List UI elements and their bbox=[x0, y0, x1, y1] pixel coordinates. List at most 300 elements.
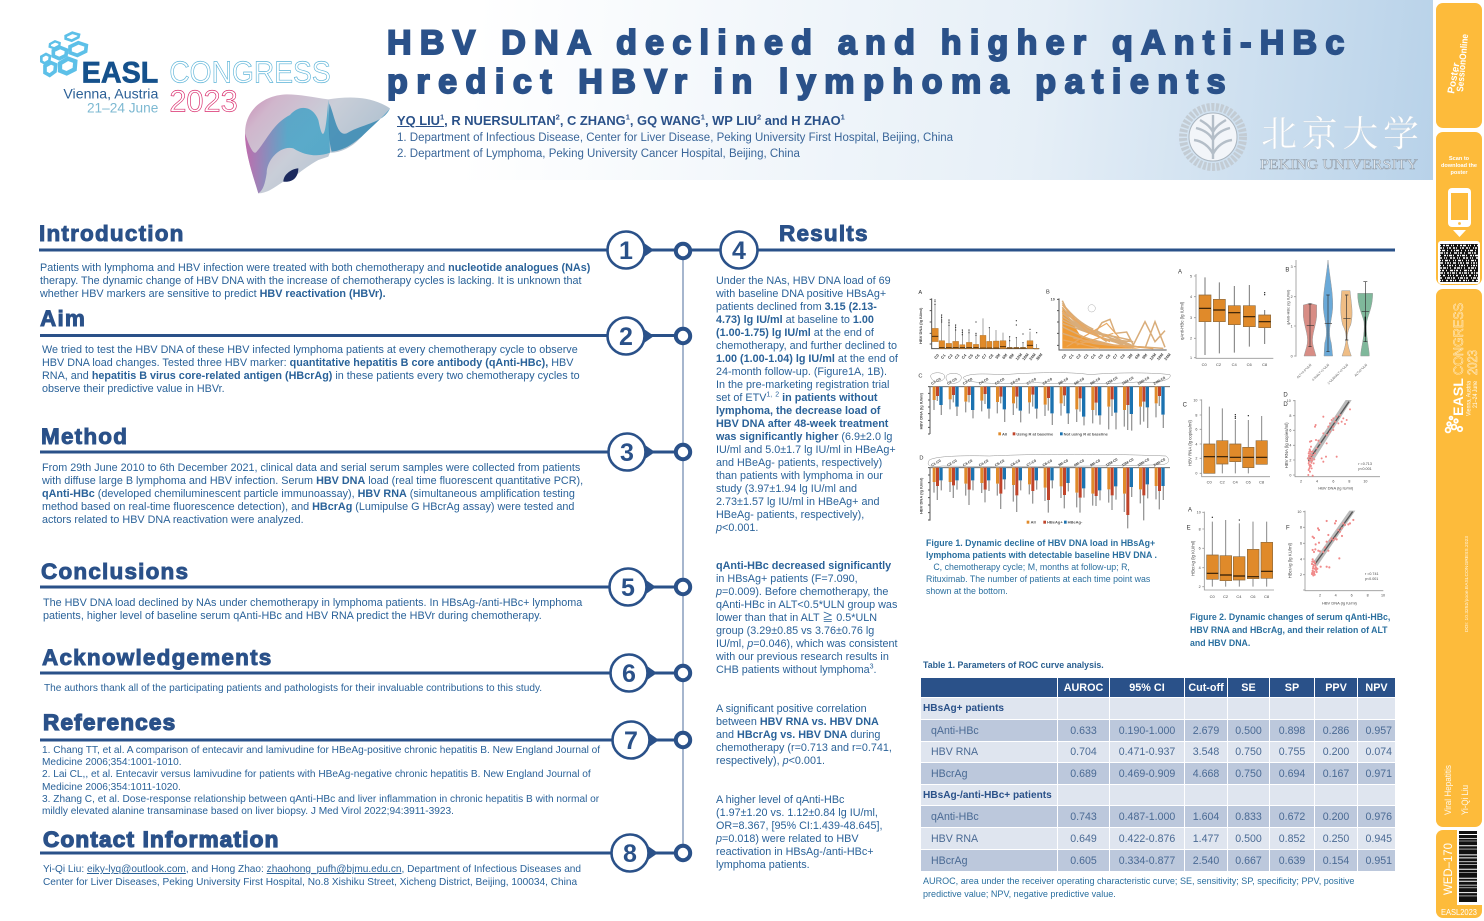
chart 2E: HBcrAg box plot bbox=[1187, 507, 1274, 599]
text: results paragraph 2: IU/ml, p=0.046), which was consistent bbox=[716, 638, 898, 650]
chart 2D: HBV RNA scatter: 8 bbox=[1289, 414, 1291, 418]
text: conclusions bbox=[43, 597, 582, 622]
table: ROC parameters: 0.469-0.909 bbox=[1119, 768, 1175, 780]
table: ROC parameters: NPV bbox=[1365, 682, 1388, 694]
chart 1C: grouped bars: Using R at baseline bbox=[1016, 431, 1054, 436]
chart 1D: grouped bars: C3-C0 bbox=[962, 459, 973, 468]
chart 1B: spaghetti plot: C4 bbox=[1090, 352, 1097, 360]
chart 1A: box plot: 36M bbox=[1035, 352, 1044, 361]
chart 1B: spaghetti plot: C5 bbox=[1097, 352, 1105, 360]
table: ROC parameters bbox=[921, 678, 1395, 871]
text: results paragraph 2: in HBsAg+ patients (F=7.090, bbox=[716, 572, 858, 584]
text: aim bbox=[42, 344, 580, 394]
affiliations bbox=[397, 132, 953, 160]
text: results paragraph 1: Under the NAs, HBV DNA load of 69 bbox=[716, 274, 891, 286]
text: method: qAnti-HBc (developed chemiluminescent particle immunoassay), HBV RNA (simultaneous amplification testing bbox=[42, 488, 575, 500]
title bbox=[387, 24, 1352, 101]
marker 6 bbox=[610, 654, 657, 692]
text: results paragraph 2: with our previous research results in bbox=[716, 650, 889, 662]
heading: Acknowledgements: Acknowledgements bbox=[42, 645, 272, 670]
table: ROC parameters: 0.167 bbox=[1323, 768, 1349, 780]
university name in Chinese: 北京大学 bbox=[1261, 106, 1419, 157]
chart 2A: qAnti-HBc box plot: C8 bbox=[1262, 362, 1268, 367]
chart 2C: HBV RNA box plot: 10 bbox=[1193, 398, 1197, 402]
chart 2A: qAnti-HBc box plot bbox=[1178, 269, 1273, 367]
chart 1D: grouped bars: HBeAg- bbox=[1068, 520, 1083, 525]
text: aim: observe their predictive value in HBVr. bbox=[42, 382, 225, 394]
table: ROC parameters: 0.074 bbox=[1365, 746, 1392, 758]
university name in English: PEKING UNIVERSITY bbox=[1260, 157, 1418, 173]
chart 1A: box plot: C4 bbox=[960, 352, 968, 360]
heading: Method: Method bbox=[41, 424, 128, 449]
text: results paragraph 3: chemotherapy (r=0.713 and r=0.741, bbox=[716, 742, 892, 754]
chart 1C: grouped bars: 15M-C0 bbox=[1121, 376, 1134, 386]
text: results paragraph 1: 4.73) lg IU/ml at baseline to 1.00 bbox=[716, 314, 874, 326]
table: ROC parameters: 0.667 bbox=[1235, 854, 1262, 866]
table: ROC parameters: HBcrAg bbox=[931, 854, 968, 866]
text: results paragraph 2: qAnti-HBc in ALT<0.5*ULN group was bbox=[716, 598, 897, 610]
figure 1 caption: Rituximab. The number of patients at each time point was bbox=[926, 574, 1150, 584]
chart 1B: spaghetti plot: 12M bbox=[1148, 352, 1158, 361]
chart 1A: box plot: C8 bbox=[987, 352, 995, 360]
chart 2B: violin plot: 2 bbox=[1291, 295, 1293, 299]
chart 1C: grouped bars: C8-C0 bbox=[1042, 377, 1053, 386]
chart 2F: HBcrAg scatter: HBcrAg (lg KU/ml) bbox=[1287, 542, 1292, 578]
affiliations: 1. Department of Infectious Disease, Center for Liver Disease, Peking University First Hospital, Beijing, China bbox=[397, 132, 953, 144]
table: ROC parameters: HBsAg+ patients bbox=[923, 703, 1004, 714]
text: results paragraph 1: 24-month follow-up. (Figure1A, 1B). bbox=[716, 366, 887, 378]
chart 2B: violin plot: 1 bbox=[1291, 324, 1293, 328]
table: ROC parameters: 0.286 bbox=[1323, 724, 1349, 736]
chart 2B: violin plot: ALT≥2*ULN bbox=[1353, 362, 1369, 377]
chart 1C: grouped bars: 18M-C0 bbox=[1137, 376, 1150, 386]
chart 2D: HBV RNA scatter: 6 bbox=[1289, 429, 1291, 433]
chart 1A: box plot: C0 bbox=[933, 352, 941, 360]
marker 4: 4 bbox=[732, 237, 746, 265]
table: ROC parameters: HBsAg-/anti-HBc+ patients bbox=[923, 790, 1052, 800]
text: contact: Center for Liver Diseases, Peking University First Hospital, No.8 Xishiku Street, Xicheng District, Beijing, 100034, China bbox=[43, 877, 577, 888]
chart 2C: HBV RNA box plot: C4 bbox=[1233, 479, 1239, 484]
text: introduction bbox=[40, 262, 590, 300]
chart 2A: qAnti-HBc box plot: A bbox=[1178, 269, 1182, 275]
text: aim: We tried to test the HBV DNA of these HBV infected lymphoma patients at every chemotherapy cycle to observe bbox=[42, 344, 578, 356]
heading: Conclusions: Conclusions bbox=[41, 559, 189, 584]
table: ROC parameters: 1.604 bbox=[1193, 810, 1219, 822]
chart 2D: HBV RNA scatter: 4 bbox=[1289, 444, 1291, 448]
year: 2023 bbox=[1465, 350, 1480, 375]
text: references: 1. Chang TT, et al. A comparison of entecavir and lamivudine for HBeAg-positive chronic hepatitis B. New England Journal of bbox=[42, 745, 600, 756]
table: ROC parameters: PPV bbox=[1325, 682, 1347, 694]
chart 1B: spaghetti plot: 18M bbox=[1156, 352, 1165, 361]
table: ROC parameters: 3.548 bbox=[1193, 746, 1219, 758]
marker 5 bbox=[610, 568, 656, 606]
text: references: Medicine 2006;354:1001-1010. bbox=[42, 757, 182, 768]
chart 1A: box plot: C3 bbox=[953, 352, 961, 360]
text: results paragraph 1: set of ETV1, 2 in patients without bbox=[716, 391, 878, 404]
chart 2E: HBcrAg box plot: C8 bbox=[1264, 594, 1270, 599]
chart 2F: HBcrAg scatter: 6 bbox=[1351, 594, 1353, 598]
table: ROC parameters: 0.200 bbox=[1323, 810, 1349, 822]
panel: scan to download: poster bbox=[1450, 170, 1468, 176]
poster id: WED–170 bbox=[1441, 843, 1455, 895]
figure 2 charts top bbox=[1178, 260, 1380, 491]
affiliations: 2. Department of Lymphoma, Peking University Cancer Hospital, Beijing, China bbox=[397, 148, 800, 160]
table: ROC parameters: 0.500 bbox=[1235, 832, 1262, 844]
chart 2D: HBV RNA scatter: r =0.713 bbox=[1358, 462, 1372, 466]
table: ROC parameters: 0.689 bbox=[1070, 768, 1097, 780]
text: results paragraph 3: A significant positive correlation bbox=[716, 702, 867, 714]
chart 2D: HBV RNA scatter: 8 bbox=[1348, 480, 1350, 484]
year 2023: 2023 bbox=[169, 85, 238, 119]
marker 2: 2 bbox=[619, 323, 633, 351]
text: results paragraph 2 bbox=[716, 560, 898, 676]
chart 2C: HBV RNA box plot: 2 bbox=[1195, 457, 1197, 461]
text: references: mildly elevated alanine transaminase based on liver biopsy. J Med Virol 2022;94:3911-3923. bbox=[42, 806, 454, 817]
text: results paragraph 4: A higher level of qAnti-HBc bbox=[716, 794, 844, 806]
table: ROC parameters: 0.951 bbox=[1365, 854, 1392, 866]
chart 2E: HBcrAg box plot: C6 bbox=[1250, 594, 1256, 599]
QR code bbox=[1438, 241, 1480, 284]
table: ROC parameters: 4.668 bbox=[1193, 768, 1219, 780]
chart 1D: grouped bars: 9M-C0 bbox=[1090, 459, 1101, 468]
text: results paragraph 1 bbox=[716, 274, 898, 534]
chart 2A: qAnti-HBc box plot: C6 bbox=[1247, 362, 1253, 367]
table: ROC parameters: HBV RNA bbox=[931, 746, 978, 758]
text: contact: Yi-Qi Liu: eiky-lyq@outlook.com, and Hong Zhao: zhaohong_pufh@bjmu.edu.cn, Department of Infectious Diseases and bbox=[43, 864, 581, 875]
chart 2E: HBcrAg box plot: 4 bbox=[1199, 566, 1201, 570]
marker 1 bbox=[608, 232, 729, 268]
chart 1C: grouped bars: 12M-C0 bbox=[1105, 376, 1118, 386]
chart 2F: HBcrAg scatter: r =0.741 bbox=[1365, 572, 1379, 576]
chart 1D: grouped bars: C2-C0 bbox=[946, 459, 958, 468]
barcode bbox=[1459, 831, 1477, 902]
text: references: 2. Lai CL,, et al. Entecavir versus lamivudine for patients with HBeAg-negative chronic hepatitis B. New England Journal of bbox=[42, 769, 591, 780]
chart 1B: spaghetti plot: 24M bbox=[1163, 352, 1172, 361]
text: conclusions: The HBV DNA load declined by NAs under chemotherapy in lymphoma patients. In HBsAg-/anti-HBc+ lymphoma bbox=[43, 597, 582, 609]
table: ROC parameters: SE bbox=[1241, 682, 1256, 694]
chart 2D: HBV RNA scatter: D bbox=[1283, 402, 1288, 408]
chart 2B: violin plot: 0 bbox=[1291, 354, 1293, 358]
figure 2 caption bbox=[1190, 612, 1390, 648]
chart 2C: HBV RNA box plot: 8 bbox=[1195, 413, 1197, 417]
author: Yi-Qi Liu bbox=[1460, 785, 1471, 815]
chart 1A: box plot: 18M bbox=[1021, 352, 1030, 361]
icon: arrow down bbox=[1453, 230, 1466, 237]
chart 1B: spaghetti plot: 10 bbox=[1051, 298, 1055, 302]
chart 1C: grouped bars: C3-C0 bbox=[962, 377, 973, 386]
chart 1B: spaghetti plot: C1 bbox=[1068, 352, 1075, 360]
icon: hexagons bbox=[1446, 417, 1462, 432]
text: results paragraph 1: HBeAg- patients, respectively), bbox=[716, 508, 864, 520]
figure 2 caption: Figure 2. Dynamic changes of serum qAnti-HBc, bbox=[1190, 612, 1390, 622]
text: method bbox=[42, 462, 583, 526]
chart 2F: HBcrAg scatter: 2 bbox=[1319, 594, 1321, 598]
table: ROC parameters: 0.487-1.000 bbox=[1119, 810, 1175, 822]
chart 1A: box plot: 6M bbox=[1001, 352, 1009, 360]
marker 4 bbox=[720, 232, 758, 268]
figure 2 caption: and HBV DNA. bbox=[1190, 638, 1250, 648]
chart 1C: grouped bars: C2-C0 bbox=[946, 377, 958, 386]
dates: 21–24 June bbox=[1473, 380, 1479, 408]
table: ROC parameters: 2.540 bbox=[1193, 854, 1219, 866]
text: results paragraph 3: respectively), p<0.001. bbox=[716, 754, 825, 766]
text: results paragraph 4 bbox=[716, 794, 883, 870]
table: ROC parameters: 0.755 bbox=[1279, 746, 1305, 758]
chart 2B: violin plot: ALT<0.5*ULN bbox=[1296, 362, 1313, 379]
chart 1B: spaghetti plot: C6 bbox=[1104, 352, 1112, 360]
chart 1D: grouped bars: C4-C0 bbox=[978, 459, 989, 468]
marker 7: 7 bbox=[624, 727, 638, 755]
table: ROC parameters: 2.679 bbox=[1193, 724, 1219, 736]
table: ROC parameters: 0.971 bbox=[1365, 768, 1392, 780]
figure 1 caption: lymphoma patients with detectable baseline HBV DNA . bbox=[926, 550, 1157, 560]
conference tag: EASL2023 bbox=[1441, 908, 1477, 917]
chart 2F: HBcrAg scatter: 8 bbox=[1300, 526, 1302, 530]
text: results paragraph 1: than patients with lymphoma in our bbox=[716, 470, 883, 482]
chart 1A: box plot bbox=[918, 290, 1044, 361]
chart 2C: HBV RNA box plot: C0 bbox=[1207, 479, 1213, 484]
chart 2A: qAnti-HBc box plot: 2 bbox=[1190, 337, 1192, 341]
table: ROC parameters: 0.898 bbox=[1279, 724, 1305, 736]
chart 1C: grouped bars: All bbox=[1002, 431, 1007, 436]
table: ROC parameters: 0.500 bbox=[1235, 724, 1262, 736]
chart 1C: grouped bars: C5-C0 bbox=[994, 377, 1005, 386]
chart 1C: grouped bars: 3M-C0 bbox=[1058, 377, 1069, 386]
table: ROC parameters: 0.200 bbox=[1323, 746, 1349, 758]
chart 1A: box plot: 3M bbox=[994, 352, 1002, 360]
chart 2F: HBcrAg scatter: 4 bbox=[1300, 557, 1302, 561]
chart 2D: HBV RNA scatter: 4 bbox=[1316, 480, 1318, 484]
marker 6: 6 bbox=[622, 660, 636, 688]
header gradient band bbox=[0, 0, 1433, 180]
marker 8 bbox=[612, 834, 658, 872]
chart 2B: violin plot: 0.5≤ALT<1*ULN bbox=[1311, 362, 1331, 382]
text: introduction: whether HBV markers are sensitive to predict HBV reactivation (HBVr). bbox=[40, 288, 386, 300]
marker 2 bbox=[608, 318, 654, 354]
text: contact bbox=[43, 864, 581, 888]
text: references: 3. Zhang C, et al. Dose-response relationship between qAnti-HBc and liver inflammation in chronic hepatitis B with normal or bbox=[42, 794, 599, 805]
chart 1A: box plot: A bbox=[918, 290, 922, 296]
heading: Contact Information: Contact Information bbox=[43, 827, 280, 852]
text: introduction: Patients with lymphoma and HBV infection were treated with both chemotherapy and nucleotide analogues (NAs) bbox=[40, 262, 590, 274]
icon: liver bbox=[245, 94, 390, 193]
table: ROC parameters: 0.639 bbox=[1279, 854, 1305, 866]
text: results paragraph 4: OR=8.367, [95% CI:1.439-48.645], bbox=[716, 820, 883, 832]
chart 1C: grouped bars: C1-C0 bbox=[930, 377, 942, 386]
chart 1A: box plot: C6 bbox=[974, 352, 981, 360]
table: ROC parameters: 0.605 bbox=[1070, 854, 1097, 866]
text: results paragraph 1: p<0.001. bbox=[716, 522, 758, 534]
text: method: From 29th June 2010 to 6th December 2021, clinical data and serial serum samples were collected from patients bbox=[42, 462, 580, 474]
chart 1D: grouped bars: 15M-C0 bbox=[1121, 458, 1134, 468]
title: predict HBVr in lymphoma patients bbox=[387, 63, 1234, 101]
chart 2C: HBV RNA box plot bbox=[1183, 398, 1270, 484]
chart 1D: grouped bars: 3M-C0 bbox=[1058, 459, 1069, 468]
location: Vienna, Austria bbox=[63, 87, 158, 103]
chart 2F: HBcrAg scatter: 8 bbox=[1367, 594, 1369, 598]
text: results paragraph 1: with baseline DNA positive HBsAg+ bbox=[716, 288, 886, 300]
text: results paragraph 1: lymphoma, the decrease load of bbox=[716, 404, 880, 416]
chart 2F: HBcrAg scatter: 6 bbox=[1300, 542, 1302, 546]
chart 1D: grouped bars: C6-C0 bbox=[1010, 459, 1021, 468]
marker 3 bbox=[608, 434, 655, 470]
table: ROC parameters: 0.945 bbox=[1365, 832, 1392, 844]
chart 2C: HBV RNA box plot: 4 bbox=[1195, 442, 1197, 446]
chart 1C: grouped bars: 24M-C0 bbox=[1153, 376, 1166, 386]
figure 1 caption: C, chemotherapy cycle; M, months at follow-up; R, bbox=[933, 562, 1130, 572]
chart 1C: grouped bars: C4-C0 bbox=[978, 377, 989, 386]
text: results paragraph 4: lymphoma patients. bbox=[716, 858, 810, 870]
chart 1D: grouped bars: C5-C0 bbox=[994, 459, 1005, 468]
chart 1C: grouped bars: C bbox=[918, 374, 922, 380]
text: results paragraph 1: In the pre-marketing registration trial bbox=[716, 378, 889, 390]
chart 1B: spaghetti plot: 9M bbox=[1141, 352, 1149, 360]
chart 2D: HBV RNA scatter: 0 bbox=[1289, 473, 1291, 477]
figure 1 charts bbox=[918, 289, 1172, 528]
table: ROC parameters: 0.743 bbox=[1070, 810, 1097, 822]
chart 2F: HBcrAg scatter: F bbox=[1286, 525, 1290, 531]
chart 1C: grouped bars bbox=[918, 373, 1170, 436]
DOI: DOI: 10.3252/pooe.EASLCONGRESS.2023 bbox=[1464, 536, 1470, 632]
figure 1 caption: Figure 1. Dynamic decline of HBV DNA load in HBsAg+ bbox=[926, 538, 1155, 548]
chart 2A: qAnti-HBc box plot: C2 bbox=[1216, 362, 1222, 367]
chart 1D: grouped bars: C1-C0 bbox=[930, 459, 942, 468]
timeline nodes bbox=[676, 244, 690, 860]
chart 1B: spaghetti plot: C8 bbox=[1119, 352, 1127, 360]
chart 1D: grouped bars: 12M-C0 bbox=[1105, 458, 1118, 468]
table: ROC parameters: 0.957 bbox=[1365, 724, 1392, 736]
chart 1B: spaghetti plot: 6M bbox=[1134, 352, 1141, 360]
chart 2B: violin plot: 1*ULN≤ALT<2*ULN bbox=[1327, 362, 1350, 385]
chart 1D: grouped bars: 6M-C0 bbox=[1074, 459, 1085, 468]
chart 2C: HBV RNA box plot: 6 bbox=[1195, 428, 1197, 432]
chart 1B: spaghetti plot: C0 bbox=[1060, 352, 1068, 360]
text: references: Medicine 2006;354:1011-1020. bbox=[42, 782, 181, 793]
chart 1C: grouped bars: C7-C0 bbox=[1026, 377, 1037, 386]
text: results paragraph 1: study (3.97±1.94 lg IU/ml and bbox=[716, 482, 857, 494]
chart 2B: violin plot: B bbox=[1285, 268, 1289, 274]
chart 2A: qAnti-HBc box plot: C0 bbox=[1202, 362, 1208, 367]
chart 2B: violin plot: 3 bbox=[1291, 265, 1293, 269]
text: results paragraph 4: reactivation in HBsAg-/anti-HBc+ bbox=[716, 846, 874, 858]
CONGRESS wordmark: CONGRESS bbox=[169, 56, 331, 90]
table: ROC parameters: 0.471-0.937 bbox=[1119, 746, 1175, 758]
text: method: method based on real-time fluorescence detection), and HBcrAg (Lumipulse G HBcrAg assay) were tested and bbox=[42, 501, 574, 513]
table: ROC parameters: 0.672 bbox=[1279, 810, 1305, 822]
text: results paragraph 2: lower than that in ALT ≧ 0.5*ULN bbox=[716, 612, 877, 624]
EASL congress logo bbox=[40, 31, 390, 194]
chart 1D: grouped bars: HBV DNA (lg IU/ml) bbox=[919, 477, 924, 514]
text: method: actors related to HBV DNA reactivation were analyzed. bbox=[42, 514, 304, 526]
chart 1D: grouped bars: All bbox=[1031, 520, 1036, 525]
chart 1A: box plot: 9M bbox=[1008, 352, 1015, 360]
panel: scan to download: download the bbox=[1441, 163, 1477, 169]
figure 2 charts bottom bbox=[1187, 507, 1385, 606]
topic: Viral Hepatitis bbox=[1443, 765, 1454, 815]
text: references bbox=[42, 745, 600, 817]
chart 1B: spaghetti plot: B bbox=[1046, 289, 1050, 295]
table: ROC parameters: 0.633 bbox=[1070, 724, 1097, 736]
chart 2E: HBcrAg box plot: C0 bbox=[1210, 594, 1216, 599]
chart 1A: box plot: C5 bbox=[967, 352, 975, 360]
table: ROC parameters: HBcrAg bbox=[931, 768, 968, 780]
chart 1A: box plot: C7 bbox=[981, 352, 988, 360]
text: results paragraph 2: p=0.009). Before chemotherapy, the bbox=[716, 586, 888, 598]
chart 1D: grouped bars: C7-C0 bbox=[1026, 459, 1037, 468]
icon: university seal bbox=[1183, 107, 1243, 167]
chart 2E: HBcrAg box plot: 6 bbox=[1199, 547, 1201, 551]
chart 1C: grouped bars: HBV DNA (lg IU/ml) bbox=[919, 392, 924, 429]
panel: poster number bbox=[1436, 830, 1482, 918]
table: ROC parameters: 0.334-0.877 bbox=[1119, 854, 1175, 866]
chart 1C: grouped bars: 9M-C0 bbox=[1090, 377, 1101, 386]
chart 1D: grouped bars: 24M-C0 bbox=[1153, 458, 1166, 468]
chart 2B: violin plot bbox=[1285, 260, 1373, 385]
chart 2C: HBV RNA box plot: C8 bbox=[1259, 479, 1265, 484]
text: results paragraph 1: HBV DNA after 48-week treatment bbox=[716, 418, 888, 430]
table: ROC parameters: 95% CI bbox=[1129, 682, 1165, 694]
chart 1C: grouped bars: 6M-C0 bbox=[1074, 377, 1085, 386]
text: results paragraph 1: and HBeAg- patients, respectively) bbox=[716, 456, 882, 468]
text: results paragraph 1: chemotherapy, and further declined to bbox=[716, 340, 897, 352]
chart 1B: spaghetti plot: C2 bbox=[1075, 352, 1083, 360]
chart 2E: HBcrAg box plot: A bbox=[1188, 507, 1192, 513]
chart 2E: HBcrAg box plot: 2 bbox=[1199, 585, 1201, 589]
marker 5: 5 bbox=[621, 574, 635, 602]
chart 2F: HBcrAg scatter: 10 bbox=[1381, 594, 1385, 598]
chart 2F: HBcrAg scatter: 10 bbox=[1297, 510, 1301, 514]
EASL wordmark: EASL bbox=[82, 57, 158, 90]
panel: scan to download: Scan to bbox=[1449, 156, 1470, 162]
chart 1D: grouped bars: 18M-C0 bbox=[1137, 458, 1150, 468]
chart 2E: HBcrAg box plot: E bbox=[1187, 525, 1191, 531]
chart 2D: HBV RNA scatter: 10 bbox=[1287, 399, 1291, 403]
table: ROC parameters: 0.704 bbox=[1070, 746, 1097, 758]
chart 2D: HBV RNA scatter bbox=[1283, 393, 1380, 491]
chart 1D: grouped bars: D bbox=[919, 455, 923, 461]
chart 1B: spaghetti plot: C7 bbox=[1112, 352, 1119, 360]
chart 2E: HBcrAg box plot: C2 bbox=[1223, 594, 1229, 599]
text: results paragraph 2: group (3.29±0.85 vs 3.76±0.76 lg bbox=[716, 624, 874, 636]
chart 2F: HBcrAg scatter: HBV DNA (lg IU/ml) bbox=[1322, 600, 1358, 605]
EASL wordmark: EASL bbox=[1450, 378, 1466, 416]
chart 2F: HBcrAg scatter bbox=[1286, 510, 1385, 605]
text: results paragraph 1: 2.73±1.57 lg IU/ml in HBeAg+ and bbox=[716, 496, 879, 508]
marker 8: 8 bbox=[623, 840, 637, 868]
chart 2A: qAnti-HBc box plot: qAnti-HBc (lg IU/ml) bbox=[1179, 301, 1184, 340]
chart 2E: HBcrAg box plot: 8 bbox=[1199, 527, 1201, 531]
icon: hexagon cluster bbox=[41, 33, 86, 75]
heading: Results: Results bbox=[779, 221, 869, 246]
table: ROC parameters: 0.833 bbox=[1235, 810, 1262, 822]
text: aim: RNA, and hepatitis B virus core-related antigen (HBcrAg) in these patients every two chemotherapy cycles to bbox=[42, 370, 580, 382]
chart 2D: HBV RNA scatter: 10 bbox=[1363, 480, 1367, 484]
chart 1C: grouped bars: C6-C0 bbox=[1010, 377, 1021, 386]
chart 1A: box plot: C2 bbox=[947, 352, 954, 360]
chart 1D: grouped bars bbox=[919, 454, 1170, 528]
chart 1D: grouped bars: C8-C0 bbox=[1042, 459, 1053, 468]
chart 2D: HBV RNA scatter: 6 bbox=[1332, 480, 1334, 484]
heading: References: References bbox=[43, 710, 176, 735]
marker 3: 3 bbox=[620, 439, 634, 467]
text: results paragraph 4: (1.97±1.20 vs. 1.12±0.84 lg IU/ml, bbox=[716, 806, 878, 818]
text: method: with diffuse large B lymphoma and HBV infection. Serum HBV DNA load (real time fluorescent quantitative PCR), bbox=[42, 475, 583, 487]
chart 2B: violin plot: qAnti-HBc (lg IU/ml) bbox=[1285, 289, 1290, 325]
table: ROC parameters: qAnti-HBc bbox=[931, 810, 979, 822]
dates: 21–24 June bbox=[87, 100, 158, 115]
table: ROC parameters: SP bbox=[1285, 682, 1299, 694]
title: HBV DNA declined and higher qAnti-HBc bbox=[387, 24, 1352, 62]
